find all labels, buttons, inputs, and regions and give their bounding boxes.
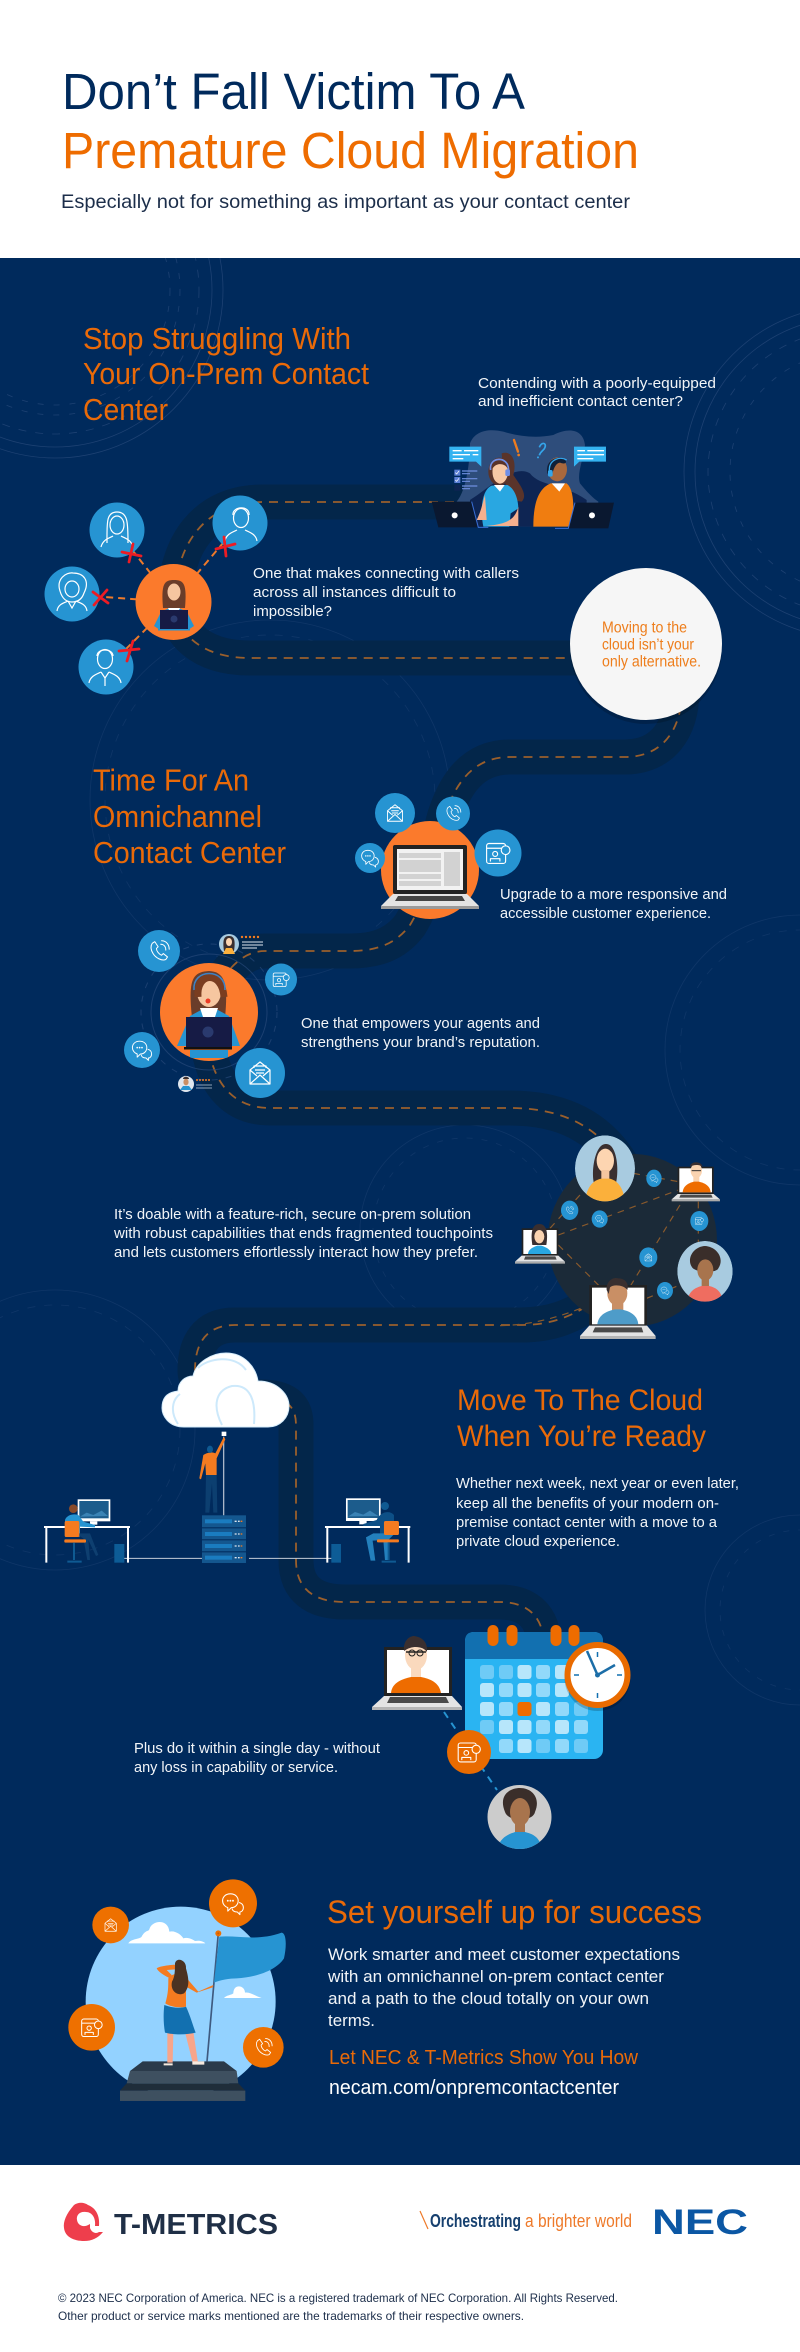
heading: move to the cloud xyxy=(457,1384,706,1453)
channel icon: phone xyxy=(138,930,180,972)
orange web icon xyxy=(447,1730,491,1774)
caller circle: man xyxy=(212,496,268,550)
text: whether next week: private cloud experience. xyxy=(456,1534,620,1550)
text: contending: and inefficient contact center? xyxy=(478,394,683,410)
heading: move to the cloud: When You’re Ready xyxy=(457,1420,706,1453)
text: work smarter: and a path to the cloud totally on your own xyxy=(328,1990,649,2008)
url: necam.com/onpremcontactcenter xyxy=(329,2076,619,2099)
text: empowers xyxy=(301,1016,540,1051)
cluster: blocked callers xyxy=(44,496,268,694)
text: doable: with robust capabilities that ends fragmented touchpoints xyxy=(113,1226,493,1242)
orange channel circles xyxy=(68,1879,284,2068)
callout: white circle xyxy=(570,568,722,724)
heading: time for an omnichannel: Omnichannel xyxy=(93,799,262,834)
text: one that makes connecting: One that makes connecting with callers xyxy=(253,566,519,582)
red x marks xyxy=(93,537,235,661)
laptop cluster xyxy=(355,793,522,919)
heading: set yourself up: Set yourself up for success xyxy=(327,1894,702,1930)
person at server xyxy=(199,1437,225,1513)
laptop: man in blue xyxy=(580,1278,656,1339)
laptop: man with glasses xyxy=(372,1636,462,1710)
calendar with clock xyxy=(465,1625,630,1759)
review badge: woman xyxy=(219,934,263,954)
copyright: © 2023 NEC Corporation of America. NEC is a registered trademark of NEC Corporation. All Rights Reserved. xyxy=(58,2291,618,2305)
text: work smarter: terms. xyxy=(328,2012,375,2030)
text: upgrade: Upgrade to a more responsive and xyxy=(500,887,727,903)
heading: stop struggling: Center xyxy=(83,392,168,427)
text: plus do it: any loss in capability or service. xyxy=(134,1760,338,1776)
illustration: woman planting flag xyxy=(68,1879,286,2101)
woman xyxy=(157,1960,213,2065)
text: doable xyxy=(113,1207,493,1261)
heading: stop struggling: Stop Struggling With xyxy=(83,321,351,356)
title: Premature Cloud Migration xyxy=(62,122,639,179)
text: plus do it xyxy=(134,1741,380,1776)
callout: white circle: only alternative. xyxy=(602,654,701,670)
call to action: Let NEC & T-Metrics Show You How xyxy=(329,2046,638,2069)
illustration: two call center agents xyxy=(432,430,614,528)
network illustration xyxy=(500,1135,733,1339)
text: whether next week: premise contact center with a move to a xyxy=(456,1515,718,1531)
footer background xyxy=(0,2165,800,2352)
small channel icons xyxy=(561,1170,708,1299)
channel icon: mail xyxy=(375,793,415,833)
text: work smarter xyxy=(327,1946,680,2030)
callout: white circle: Moving to the xyxy=(602,620,687,636)
dashed blue connector xyxy=(444,1712,497,1790)
winding road xyxy=(175,502,682,1640)
callout: white circle: cloud isn’t your xyxy=(602,636,694,654)
right desk worker xyxy=(325,1498,410,1563)
portrait: woman xyxy=(488,1785,552,1850)
logo: NEC tagline: Orchestrating xyxy=(430,2211,521,2231)
heading: time for an omnichannel xyxy=(93,762,286,870)
text: whether next week: keep all the benefits of your modern on- xyxy=(456,1496,719,1512)
left desk worker xyxy=(44,1499,130,1563)
review badge: man xyxy=(178,1076,212,1092)
logo: NEC tagline: a brighter world xyxy=(525,2211,632,2231)
title: Don’t Fall Victim To A xyxy=(62,63,525,120)
heading: stop struggling: Your On-Prem Contact xyxy=(83,356,369,391)
text: contending xyxy=(478,376,716,410)
laptop xyxy=(381,845,479,909)
text: upgrade: accessible customer experience. xyxy=(500,906,711,922)
channel icon: web xyxy=(474,830,522,876)
text: one that makes connecting: impossible? xyxy=(253,604,332,620)
text: contending: Contending with a poorly-equipped xyxy=(478,376,716,392)
logo: NEC: NEC xyxy=(652,2203,748,2242)
channel icon: chat xyxy=(124,1032,160,1068)
laptop: woman in blue xyxy=(515,1224,565,1264)
person: woman yellow top xyxy=(575,1135,635,1202)
text: whether next week xyxy=(456,1476,739,1550)
heading: stop struggling xyxy=(83,321,369,427)
text: whether next week: Whether next week, next year or even later, xyxy=(456,1476,739,1492)
channel icon: mail xyxy=(235,1048,285,1098)
caller circle: woman xyxy=(90,502,144,558)
server rack xyxy=(202,1515,246,1563)
channel icon: chat xyxy=(355,843,385,873)
text: upgrade xyxy=(500,887,727,922)
caller circle: man with tie xyxy=(78,640,134,694)
text: work smarter: Work smarter and meet customer expectations xyxy=(328,1946,680,1964)
logo: T-Metrics: T-METRICS xyxy=(114,2209,278,2241)
cloud xyxy=(162,1353,289,1427)
heading: time for an omnichannel: Time For An xyxy=(93,762,249,798)
text: doable: and lets customers effortlessly interact how they prefer. xyxy=(114,1245,478,1261)
laptop: man with glasses xyxy=(672,1162,720,1201)
copyright xyxy=(58,2291,618,2323)
agent cluster xyxy=(124,930,297,1098)
header background xyxy=(0,0,800,258)
channel icon: web xyxy=(265,964,297,996)
text: empowers: strengthens your brand’s reputation. xyxy=(301,1035,540,1051)
channel icon: phone xyxy=(436,796,470,830)
caller circle: curly hair xyxy=(44,566,100,622)
text: one that makes connecting: across all instances difficult to xyxy=(253,585,456,601)
central agent xyxy=(136,564,212,640)
copyright: Other product or service marks mentioned are the trademarks of their respective owners. xyxy=(58,2309,524,2323)
text: doable: It’s doable with a feature-rich, secure on-prem solution xyxy=(114,1207,471,1223)
logo: T-Metrics xyxy=(64,2203,278,2241)
subtitle: Especially not for something as important as your contact center xyxy=(61,191,631,213)
logo: NEC tagline xyxy=(420,2211,632,2231)
clock xyxy=(564,1645,630,1711)
text: one that makes connecting xyxy=(253,566,519,620)
illustration: office and server xyxy=(44,1432,410,1563)
person: woman red top xyxy=(677,1241,733,1303)
heading: move to the cloud: Move To The Cloud xyxy=(457,1384,703,1417)
title xyxy=(62,63,639,179)
text: plus do it: Plus do it within a single day - without xyxy=(134,1741,380,1757)
text: work smarter: with an omnichannel on-prem contact center xyxy=(327,1968,665,1986)
text: empowers: One that empowers your agents and xyxy=(301,1016,540,1032)
heading: time for an omnichannel: Contact Center xyxy=(93,835,286,870)
